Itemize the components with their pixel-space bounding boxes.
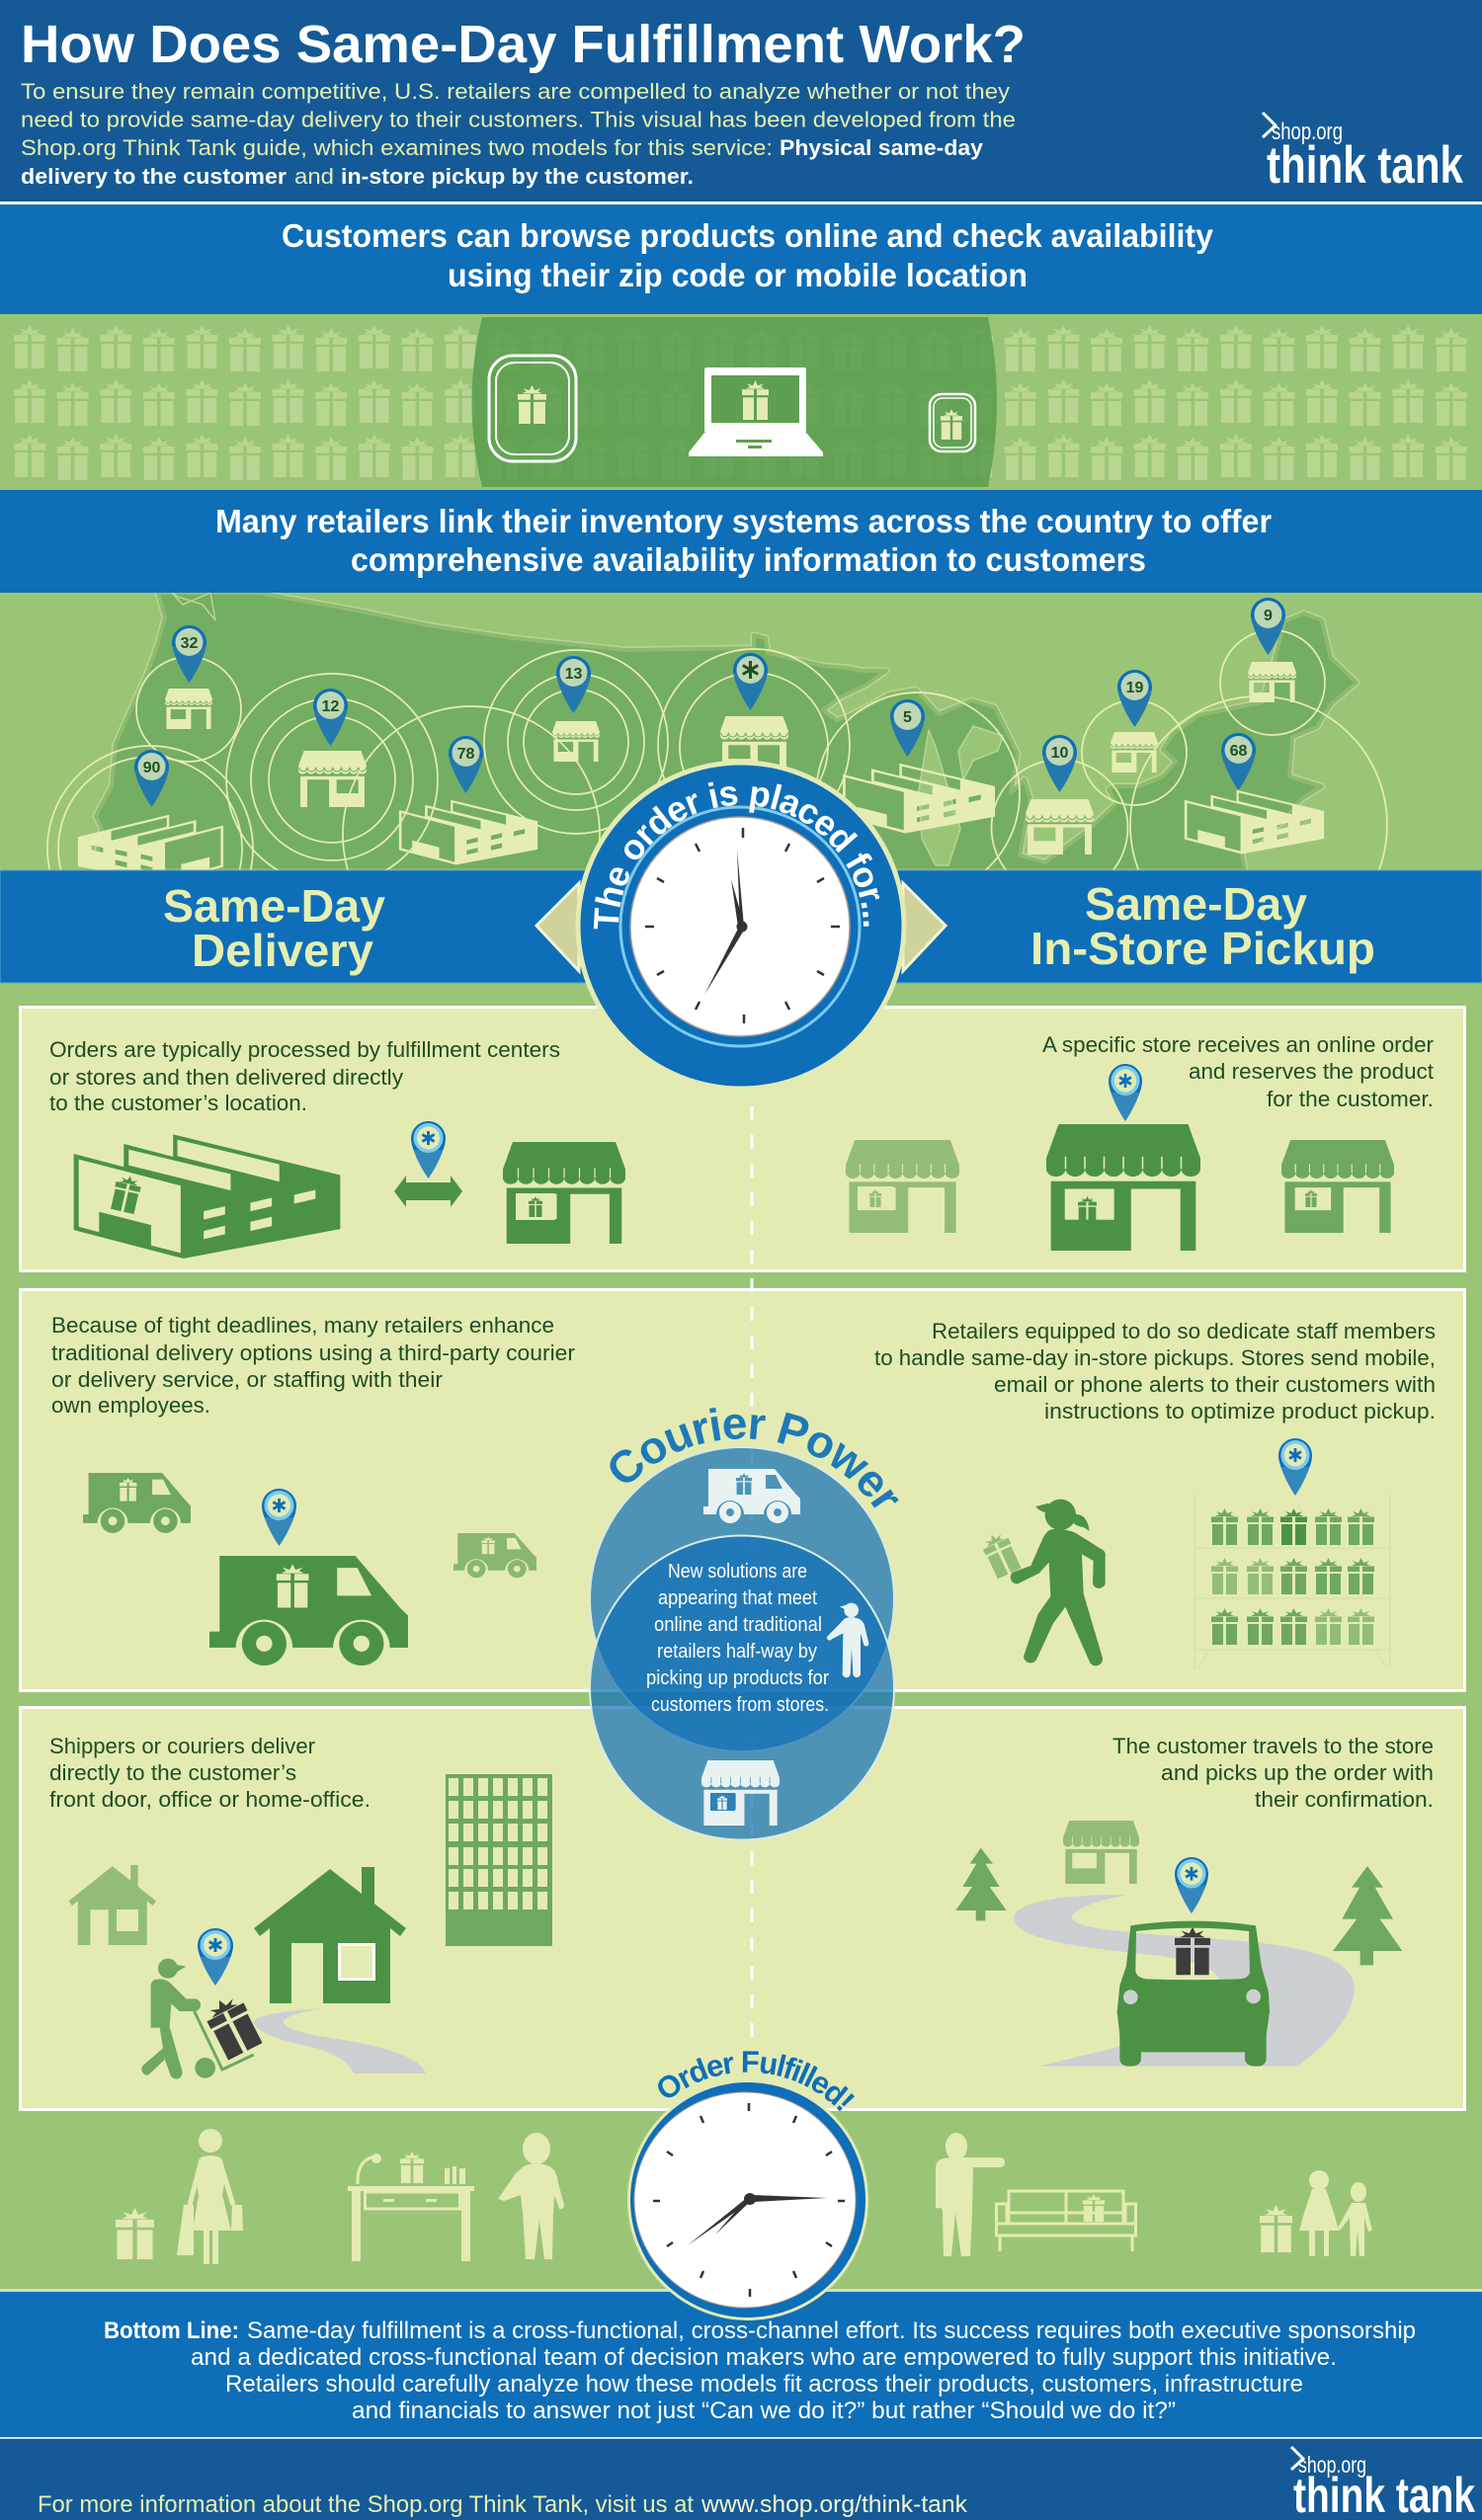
heading: same-day delivery: Delivery — [192, 925, 373, 976]
text: shippers or couriers: Shippers or couriers deliver — [49, 1734, 315, 1758]
icon: office building — [446, 1774, 552, 1946]
icon: family with gift — [1260, 2170, 1372, 2256]
text: more information: For more information about the Shop.org Think Tank, visit us at — [38, 2491, 694, 2518]
footer panel — [0, 2439, 1482, 2520]
icon: laptop — [689, 367, 823, 456]
text: shippers or couriers — [49, 1734, 370, 1812]
intro text — [21, 79, 1016, 189]
map pins: 12 — [322, 698, 340, 715]
icon: phone — [930, 394, 975, 451]
intro text: Shop.org Think Tank guide, which examines two models for this service: — [21, 135, 773, 160]
heading: same-day delivery: Same-Day — [163, 880, 385, 932]
text: dedicated staff: to handle same-day in-store pickups. Stores send mobile, — [874, 1345, 1436, 1370]
intro text: and — [294, 164, 334, 189]
curved title: The order is placed for... — [593, 782, 879, 929]
logo: shop.org think tank — [1263, 113, 1463, 195]
icon: main store — [1046, 1124, 1200, 1251]
map pins: 9 — [1264, 608, 1273, 624]
text: dedicated staff — [874, 1319, 1436, 1423]
map stores — [165, 662, 1296, 854]
map pins: 13 — [565, 666, 583, 683]
text: new solutions: retailers half-way by — [657, 1641, 817, 1663]
heading: same-day in-store pickup: In-Store Pickup — [1030, 923, 1375, 974]
clock: order placed — [535, 761, 947, 1087]
clock hands — [704, 850, 747, 995]
title: How Does Same-Day Fulfillment Work? — [21, 15, 1026, 74]
text: new solutions: customers from stores. — [651, 1694, 829, 1716]
map pins: 90 — [143, 760, 160, 776]
icon: front path — [254, 2008, 426, 2073]
text: fulfillment centers — [49, 1037, 560, 1115]
icon: gift shelves — [1194, 1494, 1390, 1669]
banner: inventory systems — [0, 490, 1482, 593]
clock ticks — [645, 828, 840, 1023]
icon: store — [503, 1142, 625, 1244]
icon: courier person — [827, 1603, 868, 1677]
heading: courier power: Courier Power — [610, 1407, 899, 1508]
map pins: 10 — [1051, 745, 1069, 762]
curved title: Order Fulfilled! — [658, 2051, 855, 2112]
text: specific store: for the customer. — [1267, 1087, 1434, 1111]
map pins: 19 — [1126, 680, 1144, 696]
icon: woman carrying gift — [979, 1500, 1106, 1666]
intro text: need to provide same-day delivery to their customers. This visual has been developed from the — [21, 107, 1016, 132]
text: new solutions: online and traditional — [654, 1614, 822, 1636]
icon: destination scene — [955, 1848, 1402, 2067]
map warehouses — [78, 764, 1324, 882]
text: customer travels: and picks up the order with — [1161, 1760, 1434, 1785]
text: new solutions — [646, 1561, 829, 1716]
text: specific store — [1042, 1032, 1434, 1111]
text: tight deadlines: or delivery service, or staffing with their — [51, 1367, 443, 1392]
icon: mid store — [1281, 1140, 1394, 1233]
text: tight deadlines — [51, 1313, 575, 1418]
land outline — [94, 593, 1357, 870]
text: new solutions: New solutions are — [668, 1561, 807, 1583]
text: bottom line — [104, 2317, 1416, 2424]
banner: browse products: using their zip code or mobile location — [448, 257, 1028, 293]
text: dedicated staff: Retailers equipped to do so dedicate staff members — [932, 1319, 1436, 1343]
text: shippers or couriers: front door, office or home-office. — [49, 1787, 370, 1812]
icon: tablet — [489, 356, 576, 461]
intro text: Physical same-day — [780, 135, 984, 160]
bottom line panel — [0, 2289, 1482, 2439]
text: fulfillment centers: or stores and then delivered directly — [49, 1065, 403, 1090]
map pins: 32 — [181, 635, 198, 652]
map pins: 68 — [1230, 743, 1247, 760]
courier power venn — [589, 1407, 899, 1841]
icon: gift in car — [1175, 1927, 1210, 1975]
icon: location pin — [1109, 1064, 1142, 1121]
icon: destination store — [1063, 1821, 1139, 1884]
two model banner — [0, 870, 1482, 983]
bottom destinations band — [116, 2129, 1372, 2264]
text: bottom line: Same-day fulfillment is a cross-functional, cross-channel effort. Its success requires both executive sponsorship — [247, 2317, 1416, 2344]
text: fulfillment centers: to the customer’s location. — [49, 1091, 307, 1115]
text: tight deadlines: traditional delivery options using a third-party courier — [51, 1341, 575, 1365]
text: bottom line: Bottom Line: — [104, 2317, 239, 2344]
icon: left tree — [955, 1848, 1007, 1920]
icon: car — [1117, 1921, 1270, 2067]
icon: courier with hand truck — [141, 1959, 264, 2079]
text: fulfillment centers: Orders are typically processed by fulfillment centers — [49, 1037, 560, 1062]
side diamonds — [536, 883, 946, 971]
panel: last mile — [20, 1707, 1464, 2110]
icon: sofa — [996, 2191, 1136, 2251]
banner: inventory systems: comprehensive availability information to customers — [351, 541, 1146, 578]
text: new solutions: appearing that meet — [658, 1587, 817, 1609]
text: dedicated staff: instructions to optimize product pickup. — [1044, 1399, 1436, 1423]
text: customer travels: their confirmation. — [1255, 1787, 1434, 1812]
map of store network — [46, 593, 1388, 869]
logo: shop.org think tank: shop.org — [1298, 2452, 1366, 2478]
intro text: To ensure they remain competitive, U.S. retailers are compelled to analyze whether or not they — [21, 79, 1010, 104]
icon: desk — [348, 2152, 474, 2261]
banner: browse products: Customers can browse products online and check availability — [282, 217, 1214, 254]
text: specific store: and reserves the product — [1189, 1059, 1434, 1084]
text: tight deadlines: Because of tight deadlines, many retailers enhance — [51, 1313, 554, 1338]
gift shelf band with devices — [0, 314, 1482, 490]
text: more information: www.shop.org/think-tank — [700, 2491, 968, 2518]
clock ticks — [653, 2103, 845, 2297]
banner: browse products — [0, 204, 1482, 314]
icon: store — [701, 1760, 780, 1826]
icon: small van — [453, 1533, 536, 1578]
text: new solutions: picking up products for — [646, 1667, 829, 1689]
icon: location pin — [198, 1928, 233, 1986]
icon: van — [703, 1469, 800, 1523]
venn circles — [590, 1447, 894, 1839]
icon: gift — [116, 2208, 154, 2259]
text: bottom line: and a dedicated cross-functional team of decision makers who are empowered to fully support this initiative. — [191, 2344, 1337, 2371]
panel: processing — [20, 1008, 1464, 1270]
icon: location pin — [1278, 1438, 1312, 1496]
icon: large van — [209, 1556, 408, 1666]
logo: shop.org think tank: shop.org — [1272, 119, 1343, 145]
icon: woman with bags — [177, 2129, 243, 2264]
text: bottom line: Retailers should carefully analyze how these models fit across their products, customers, infrastructure — [225, 2371, 1303, 2398]
icon: warehouse — [74, 1134, 340, 1259]
icon: mid van — [83, 1473, 191, 1533]
panel: courier options — [20, 1290, 1464, 1691]
intro text: in-store pickup by the customer. — [341, 164, 694, 189]
clock: order fulfilled — [627, 2051, 868, 2320]
coverage circles — [46, 630, 1388, 869]
text: customer travels: The customer travels to the store — [1112, 1734, 1434, 1758]
map pins — [134, 598, 1285, 807]
icon: location pin — [411, 1121, 446, 1179]
clock hands — [688, 2193, 827, 2245]
heading: same-day in-store pickup: Same-Day — [1085, 878, 1307, 930]
text: shippers or couriers: directly to the customer’s — [49, 1760, 296, 1785]
icon: location pin — [1175, 1857, 1208, 1913]
banner: inventory systems: Many retailers link their inventory systems across the country to offer — [215, 503, 1272, 539]
text: specific store: A specific store receives an online order — [1042, 1032, 1434, 1057]
heading: same-day in-store pickup — [1030, 878, 1375, 974]
text: tight deadlines: own employees. — [51, 1393, 210, 1418]
icon: man at desk — [498, 2133, 564, 2259]
icon: small house — [69, 1865, 156, 1945]
map pins: 78 — [457, 746, 474, 763]
icon: light store — [846, 1140, 959, 1233]
header panel — [0, 0, 1482, 204]
center dashed divider — [751, 1106, 753, 2037]
icon: location pin — [262, 1489, 296, 1546]
logo: shop.org think tank — [1291, 2447, 1475, 2520]
icon: road — [1014, 1895, 1355, 2067]
icon: large house — [254, 1867, 406, 2003]
heading: same-day delivery — [163, 880, 385, 976]
map pins: 5 — [903, 709, 912, 726]
text: customer travels — [1112, 1734, 1434, 1812]
arrow: two-way — [394, 1176, 462, 1207]
text: bottom line: and financials to answer not just “Can we do it?” but rather “Should we do it?” — [352, 2398, 1176, 2424]
icon: man pointing — [936, 2133, 1005, 2256]
intro text: delivery to the customer — [21, 164, 287, 189]
icon: right tree — [1333, 1866, 1402, 1965]
text: dedicated staff: email or phone alerts to their customers with — [994, 1372, 1436, 1397]
